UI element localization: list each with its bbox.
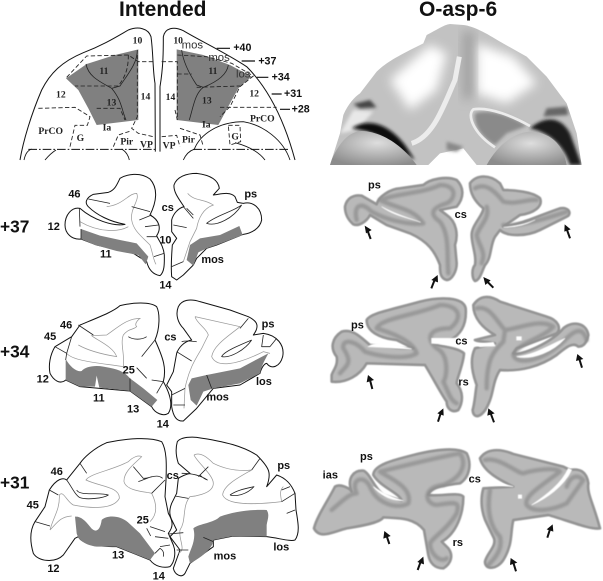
right orbital shaded area — [177, 49, 252, 125]
section labels: 46 — [68, 189, 81, 201]
right hemisphere section — [168, 437, 298, 576]
section labels: cs — [167, 470, 179, 482]
cytoarchitectonic area labels: 12 — [249, 89, 259, 100]
cytoarchitectonic area labels: 10 — [133, 35, 142, 46]
cytoarchitectonic area labels — [38, 35, 275, 151]
section level ticks and numbers: +34 — [272, 72, 290, 84]
cytoarchitectonic area labels: G — [231, 131, 239, 142]
cytoarchitectonic area labels: 11 — [208, 66, 218, 77]
section level label: +34 — [0, 342, 30, 362]
cytoarchitectonic area labels: Ia — [103, 123, 111, 134]
sulcus labels mos, los: mos — [208, 52, 230, 64]
orbital sulci and dashed area boundaries — [28, 50, 290, 149]
left hemisphere stained section — [332, 298, 466, 411]
section labels: cs — [164, 332, 177, 344]
panel: O-asp-6 brain photograph — [330, 24, 582, 165]
section labels — [48, 188, 257, 291]
arrows and labels: rs — [458, 376, 469, 388]
section level ticks and numbers — [217, 42, 310, 116]
section labels: mos — [206, 392, 229, 404]
cytoarchitectonic area labels: VP — [140, 140, 153, 151]
section labels: 13 — [112, 549, 124, 561]
section labels: 12 — [37, 373, 49, 385]
sulcus labels mos, los: mos — [182, 40, 203, 52]
section labels: 45 — [27, 499, 39, 511]
cytoarchitectonic area labels: PrCO — [38, 126, 63, 137]
left hemisphere section — [31, 439, 175, 567]
right hemisphere outline — [160, 28, 295, 160]
section level ticks and numbers: +40 — [233, 42, 251, 54]
arrows and labels: ps — [351, 320, 364, 332]
panel: histology section +31 — [314, 450, 600, 571]
section labels: 46 — [51, 466, 63, 478]
cytoarchitectonic area labels: PrCO — [250, 114, 275, 125]
arrows and labels: cs — [469, 474, 481, 486]
right hemisphere section — [167, 300, 283, 421]
photograph of ventral frontal lobes — [330, 24, 582, 165]
arrows and labels: rs — [453, 537, 463, 549]
left hemisphere stained section — [314, 450, 469, 568]
left hemisphere section — [65, 174, 164, 276]
section labels: 12 — [47, 563, 60, 575]
section labels: 10 — [159, 234, 172, 246]
section labels: cs — [162, 202, 174, 214]
cytoarchitectonic area labels: 13 — [107, 97, 116, 108]
cytoarchitectonic area labels: 11 — [99, 66, 109, 77]
cytoarchitectonic area labels: 14 — [141, 91, 150, 102]
panel: intended ventral surface map — [20, 28, 310, 160]
section labels: ps — [244, 188, 257, 200]
panel: histology section +37 — [345, 177, 571, 288]
section level ticks and numbers: +31 — [284, 88, 302, 100]
panel: histology section +34 — [332, 297, 588, 422]
left hemisphere outline — [20, 28, 155, 160]
right hemisphere stained section — [480, 450, 600, 568]
section labels: 12 — [48, 221, 60, 233]
arrows and labels — [323, 451, 553, 571]
arrows and labels — [351, 320, 583, 422]
section level ticks and numbers: +37 — [258, 55, 276, 67]
section labels — [27, 460, 290, 581]
cytoarchitectonic area labels: VP — [163, 140, 176, 151]
temporal pole outlines — [24, 122, 290, 160]
section labels: 11 — [93, 392, 105, 404]
section labels: 46 — [60, 320, 72, 332]
section labels: mos — [201, 254, 224, 266]
arrows and labels — [365, 179, 571, 288]
sulcus labels mos, los — [182, 40, 251, 81]
left hemisphere stained section — [345, 178, 462, 280]
cytoarchitectonic area labels: 14 — [166, 92, 175, 103]
right hemisphere stained section — [470, 177, 569, 281]
section level label: +37 — [0, 217, 29, 237]
section labels: mos — [214, 550, 236, 562]
section labels — [37, 318, 274, 430]
left orbital shaded area — [66, 49, 138, 125]
section level ticks and numbers: +28 — [292, 104, 310, 116]
section labels: 14 — [157, 418, 170, 430]
arrows and labels: ps — [368, 179, 381, 191]
arrows and labels: ias — [323, 470, 338, 482]
left hemisphere section — [49, 303, 171, 415]
right hemisphere stained section — [472, 297, 588, 416]
section labels: los — [273, 542, 289, 554]
arrows and labels: cs — [455, 336, 468, 348]
panel: intended section +34 — [0, 300, 283, 430]
sulcus labels mos, los: los — [236, 69, 251, 81]
section labels: 45 — [44, 331, 56, 343]
cytoarchitectonic area labels: 12 — [56, 89, 66, 100]
arrows and labels: cs — [455, 209, 467, 221]
section labels: ps — [262, 318, 274, 330]
section labels: 13 — [127, 404, 139, 416]
section labels: 25 — [137, 515, 149, 527]
section labels: 25 — [123, 365, 135, 377]
right hemisphere section — [171, 173, 262, 280]
section level label: +31 — [0, 472, 30, 492]
section labels: los — [256, 376, 272, 388]
cytoarchitectonic area labels: 10 — [173, 35, 183, 46]
arrows and labels: ps — [360, 451, 373, 463]
section labels: 14 — [159, 279, 172, 291]
panel: intended section +31 — [0, 437, 298, 581]
section labels: 11 — [100, 249, 112, 261]
cytoarchitectonic area labels: 13 — [202, 95, 212, 106]
panel: intended section +37 — [0, 173, 262, 291]
cytoarchitectonic area labels: Ia — [202, 119, 211, 130]
section labels: ps — [277, 460, 290, 472]
cytoarchitectonic area labels: G — [77, 133, 85, 144]
cytoarchitectonic area labels: Pir — [120, 137, 134, 148]
cytoarchitectonic area labels: Pir — [182, 135, 196, 146]
